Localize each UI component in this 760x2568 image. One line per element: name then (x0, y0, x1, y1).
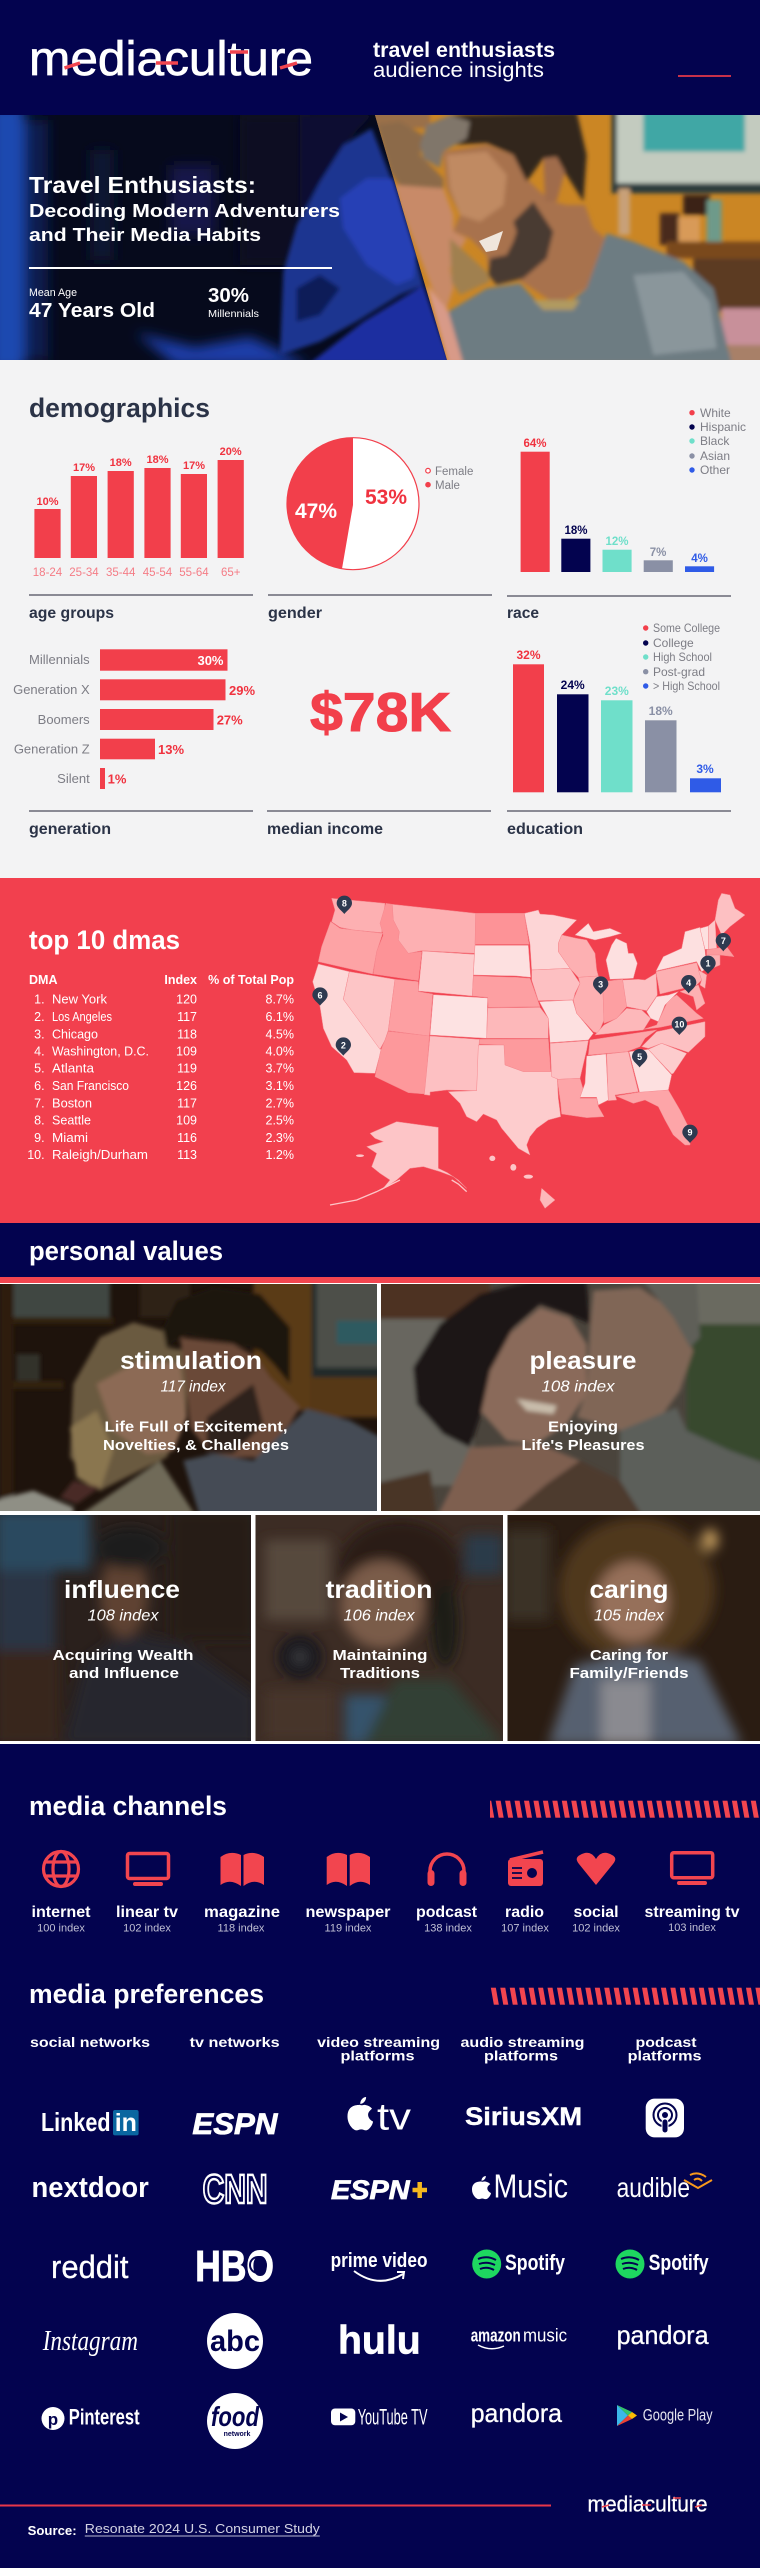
logo: mediaculture: mediaculture (29, 33, 313, 86)
table: top 10 dmas: Seattle (52, 1114, 91, 1128)
logo: ESPN+: ESPN (331, 2175, 410, 2205)
table: top 10 dmas: 3. (34, 1027, 45, 1041)
chart: education (513, 621, 721, 792)
panel: caring (505, 1515, 760, 1745)
map: united states: 6 (317, 990, 322, 1000)
column headings: platforms (628, 2048, 702, 2064)
logo: prime video: prime video (331, 2250, 428, 2272)
chart: education: 24% (561, 678, 585, 692)
logo: food network (207, 2393, 263, 2449)
table: top 10 dmas: 126 (176, 1079, 197, 1093)
text: pleasure: pleasure (530, 1347, 637, 1375)
label: gender: gender (268, 605, 322, 622)
table: top 10 dmas: 3.1% (266, 1079, 294, 1093)
legend: race: Asian (700, 449, 730, 463)
column headings: video streaming (317, 2034, 440, 2050)
footer logo: mediaculture: mediaculture (588, 2492, 708, 2516)
source note: Resonate 2024 U.S. Consumer Study (85, 2522, 321, 2536)
text: pleasure (522, 1347, 644, 1454)
channel indexes: 102 index (572, 1923, 620, 1935)
chart: generation (13, 649, 255, 789)
logo: Spotify podcast: Spotify (649, 2250, 709, 2275)
text: stimulation: Life Full of Excitement, (104, 1419, 288, 1436)
table: top 10 dmas: 116 (177, 1131, 197, 1145)
table: top 10 dmas: 120 (176, 993, 197, 1007)
chart: age groups: 18% (146, 454, 169, 466)
logo: Pinterest: Pinterest (69, 2405, 140, 2430)
table: top 10 dmas: 4.5% (266, 1027, 294, 1041)
channel labels: linear tv (116, 1904, 178, 1921)
channel indexes: 103 index (668, 1922, 716, 1934)
column headings: tv networks (190, 2034, 280, 2050)
icon: radio (508, 1852, 543, 1886)
text: tradition (326, 1576, 432, 1682)
legend: education: College (653, 636, 694, 650)
text: pleasure: 108 index (542, 1379, 616, 1396)
table: top 10 dmas: DMA (29, 973, 57, 987)
text: tradition: Maintaining (332, 1647, 428, 1664)
chart: generation: 1% (108, 772, 127, 786)
text: stimulation: stimulation (120, 1347, 262, 1375)
logo: abc: abc (210, 2325, 260, 2358)
logo: food network: network (224, 2431, 251, 2438)
text: stimulation: Novelties, & Challenges (103, 1437, 289, 1454)
text: tradition: 106 index (344, 1608, 416, 1625)
source note: Source: (28, 2524, 77, 2538)
chart: gender pie (287, 438, 473, 570)
table: top 10 dmas: 2.3% (266, 1131, 294, 1145)
text: influence (52, 1576, 194, 1682)
table: top 10 dmas: Los Angeles (52, 1010, 112, 1024)
column headings: podcast (636, 2034, 697, 2050)
map: united states (312, 893, 745, 1208)
channel indexes: 119 index (325, 1923, 372, 1935)
chart: race: 4% (691, 553, 708, 565)
column headings: social networks (30, 2034, 150, 2050)
map: united states: 7 (721, 936, 726, 946)
table: top 10 dmas: % of Total Pop (208, 973, 294, 987)
chart: age groups: 35-44 (106, 567, 136, 579)
table: top 10 dmas: 2. (34, 1010, 45, 1024)
panel: media channels (0, 1744, 760, 1964)
table: top 10 dmas: 117 (177, 1010, 197, 1024)
chart: education: 32% (516, 648, 541, 662)
label: median income: median income (267, 821, 383, 838)
legend: race: Black (700, 434, 730, 448)
logo: amazon music (471, 2326, 567, 2349)
logo: Spotify podcast (616, 2250, 709, 2278)
hero headline (29, 172, 340, 245)
label: age groups: age groups (29, 605, 114, 622)
logo: reddit: reddit (51, 2249, 129, 2285)
icon: newspaper (327, 1853, 370, 1886)
logo: Spotify audio: Spotify (505, 2250, 566, 2275)
header title (373, 39, 555, 82)
stat: median income: $78K (310, 681, 451, 743)
logo: ESPN: ESPN (192, 2108, 279, 2141)
chart: age groups: 20% (220, 446, 242, 458)
legend: race: Other (700, 463, 730, 477)
channel indexes: 138 index (424, 1923, 472, 1935)
text: tradition: Traditions (340, 1665, 420, 1682)
logo: HBO: HBO (195, 2242, 274, 2291)
heading: top 10 dmas: top 10 dmas (29, 925, 180, 955)
channel labels: newspaper (306, 1904, 390, 1921)
panel: demographics (0, 360, 760, 878)
chart: age groups: 17% (73, 462, 95, 474)
heading: media channels: media channels (29, 1791, 227, 1821)
logo: abc (207, 2313, 263, 2369)
table: top 10 dmas: 117 (177, 1096, 197, 1110)
map: united states: 9 (687, 1128, 692, 1138)
logo: Apple Music (472, 2168, 568, 2204)
logo: LinkedIn: Linked (41, 2107, 110, 2137)
icon: linear tv (128, 1854, 168, 1886)
chart: generation: Generation Z (14, 742, 90, 756)
map: united states: 5 (637, 1052, 642, 1062)
hero headline: Decoding Modern Adventurers (29, 201, 340, 221)
logo: Apple Music: Music (494, 2168, 568, 2204)
logo: nextdoor: nextdoor (32, 2172, 149, 2204)
text: caring: Family/Friends (570, 1665, 688, 1682)
millennials stat: 30% (208, 285, 249, 307)
table: top 10 dmas: Miami (52, 1131, 88, 1145)
logo: amazon music: music (523, 2326, 567, 2346)
chart: generation: 30% (197, 653, 224, 668)
chart: age groups: 18% (110, 457, 132, 469)
text: influence: 108 index (88, 1608, 160, 1625)
map: united states: 2 (341, 1040, 346, 1050)
map: united states: 1 (705, 959, 710, 969)
logo: Spotify audio (472, 2250, 566, 2278)
icon: social heart (577, 1853, 615, 1885)
chart: gender pie: 47% (295, 500, 337, 523)
chart: generation: Millennials (29, 652, 90, 667)
text: caring: caring (590, 1576, 668, 1604)
chart: generation: 13% (158, 742, 184, 757)
legend: education: High School (653, 650, 712, 664)
chart: gender pie: 53% (365, 486, 407, 509)
column headings: platforms (484, 2048, 558, 2064)
logo: YouTube TV: YouTube TV (358, 2405, 428, 2430)
chart: race: 64% (523, 438, 547, 450)
table: top 10 dmas: 1. (34, 993, 45, 1007)
table: top 10 dmas: 8.7% (266, 993, 294, 1007)
chart: age groups: 45-54 (143, 567, 173, 579)
map pins (312, 896, 731, 1143)
chart: race: 18% (564, 525, 588, 537)
hero photo: warm side with man (370, 108, 760, 365)
heading: media preferences: media preferences (29, 1979, 264, 2009)
logo: Apple TV (348, 2096, 411, 2138)
footer (0, 2492, 708, 2538)
mean age stat: 47 Years Old (29, 300, 155, 322)
chart: education: 23% (605, 684, 629, 698)
channel labels: podcast (416, 1904, 477, 1921)
table: top 10 dmas: Washington, D.C. (52, 1044, 149, 1058)
table: top 10 dmas: Boston (52, 1096, 92, 1110)
text: caring: 105 index (594, 1608, 665, 1625)
logo: SiriusXM: SiriusXM (465, 2103, 582, 2131)
icon: internet globe (44, 1852, 78, 1886)
channel indexes: 118 index (218, 1923, 265, 1935)
logo: Apple Podcasts (646, 2099, 684, 2137)
panel: pleasure (373, 1277, 760, 1517)
table: top 10 dmas: New York (52, 993, 108, 1007)
chart: age groups: 10% (36, 496, 59, 508)
text: stimulation: 117 index (160, 1379, 226, 1396)
table: top 10 dmas: 5. (34, 1062, 45, 1076)
hero headline: and Their Media Habits (29, 225, 261, 245)
logo: Google Play (617, 2405, 713, 2426)
channel labels: streaming tv (644, 1904, 740, 1921)
panel: media preferences (29, 1979, 760, 2449)
text: tradition: tradition (326, 1576, 432, 1604)
logo: Instagram: Instagram (42, 2326, 138, 2357)
icon: magazine (220, 1853, 264, 1886)
table: top 10 dmas: 109 (176, 1114, 197, 1128)
icon: podcast headphones (428, 1854, 466, 1886)
legend: race (689, 406, 746, 477)
column headings: platforms (340, 2048, 415, 2064)
hero headline: Travel Enthusiasts: (29, 172, 256, 198)
chart: education: 3% (696, 762, 714, 776)
chart: race: 12% (605, 536, 629, 548)
text: influence: Acquiring Wealth (52, 1647, 194, 1664)
chart: age groups: 17% (183, 460, 205, 472)
text: influence: and Influence (69, 1665, 179, 1682)
label: education: education (507, 821, 583, 838)
table: top 10 dmas: 10. (27, 1148, 45, 1162)
chart: gender pie: Male (435, 480, 460, 492)
table: top 10 dmas: 6. (34, 1079, 45, 1093)
panel: stimulation (0, 1277, 387, 1517)
logo: food network: food (211, 2401, 260, 2432)
text: stimulation (103, 1347, 289, 1454)
table: top 10 dmas: 113 (177, 1148, 197, 1162)
legend: education: > High School (653, 679, 720, 693)
panel: influence (0, 1510, 255, 1745)
column headings: audio streaming (460, 2034, 584, 2050)
table: top 10 dmas: 4.0% (266, 1044, 294, 1058)
chart: education: 18% (649, 704, 673, 718)
map: united states: 8 (342, 899, 347, 909)
channel labels: internet (32, 1904, 90, 1921)
map: united states: 3 (598, 979, 603, 989)
text: caring (570, 1576, 688, 1682)
legend: race: Hispanic (700, 420, 746, 434)
table: top 10 dmas: 109 (176, 1044, 197, 1058)
logo: pandora audio: pandora (471, 2398, 563, 2428)
table: top 10 dmas: Atlanta (52, 1062, 94, 1076)
channel indexes (37, 1922, 716, 1935)
panel: top 10 dmas (0, 878, 760, 1223)
table: top 10 dmas: 2.7% (266, 1096, 294, 1110)
table: top 10 dmas: 2.5% (266, 1114, 294, 1128)
map: united states: 10 (674, 1020, 684, 1030)
table: top 10 dmas: Raleigh/Durham (52, 1148, 148, 1162)
label: race: race (507, 605, 539, 622)
millennials stat: Millennials (208, 308, 259, 320)
table: top 10 dmas: 4. (34, 1044, 45, 1058)
channel labels: social (574, 1904, 618, 1921)
chart: generation: Silent (57, 771, 90, 786)
label: generation: generation (29, 821, 111, 838)
table: top 10 dmas: 1.2% (266, 1148, 294, 1162)
millennials stat (208, 285, 259, 320)
header title: audience insights (373, 59, 544, 82)
band: personal values: personal values (29, 1236, 223, 1266)
header band (0, 0, 760, 115)
mean age stat (29, 287, 155, 322)
chart: age groups (33, 446, 244, 579)
logo: Pinterest: p (48, 2410, 58, 2429)
legend: education: Some College (653, 621, 720, 635)
table: top 10 dmas: 119 (177, 1062, 197, 1076)
table: top 10 dmas: Index (164, 973, 197, 987)
text: influence: influence (64, 1576, 180, 1604)
logo: hulu: hulu (338, 2319, 421, 2363)
chart: race (521, 406, 746, 572)
table: top 10 dmas: 118 (177, 1027, 197, 1041)
logo: LinkedIn: in (115, 2109, 137, 2137)
logo: amazon music: amazon (471, 2326, 521, 2346)
channel indexes: 100 index (37, 1923, 85, 1935)
table: top 10 dmas: 3.7% (266, 1062, 294, 1076)
chart: age groups: 55-64 (179, 567, 209, 579)
band: personal values (0, 1223, 760, 1283)
channel indexes: 107 index (501, 1923, 549, 1935)
text: caring: Caring for (590, 1647, 668, 1664)
table: top 10 dmas: 9. (34, 1131, 45, 1145)
table: top 10 dmas: 8. (34, 1114, 45, 1128)
map: united states: 4 (686, 978, 691, 988)
logo: Google Play: Google Play (643, 2406, 713, 2424)
chart: generation: 27% (217, 712, 243, 728)
channel labels (32, 1904, 740, 1921)
channel indexes: 102 index (123, 1923, 171, 1935)
channel labels: radio (505, 1904, 544, 1921)
chart: generation: 29% (229, 683, 255, 698)
table: top 10 dmas (27, 973, 294, 1162)
source note (28, 2522, 321, 2538)
logo: CNN: CNN (203, 2166, 268, 2212)
legend: education: Post-grad (653, 665, 705, 679)
chart: age groups: 25-34 (69, 567, 99, 579)
table: top 10 dmas: 7. (34, 1096, 45, 1110)
logo: prime video (331, 2250, 428, 2281)
table: top 10 dmas: Chicago (52, 1027, 98, 1041)
channel labels: magazine (204, 1904, 280, 1921)
logo: Pinterest (42, 2405, 140, 2430)
text: pleasure: Enjoying (548, 1419, 618, 1436)
table: top 10 dmas: 6.1% (266, 1010, 294, 1024)
column headings (30, 2034, 702, 2064)
chart: age groups: 65+ (221, 567, 241, 579)
hero photo panel (0, 105, 760, 370)
legend: education (643, 621, 720, 693)
table: top 10 dmas: San Francisco (52, 1079, 129, 1093)
header title: travel enthusiasts (373, 39, 555, 62)
icon: streaming tv (672, 1853, 713, 1885)
hero photo: blue duotone side (0, 105, 450, 370)
mean age stat: Mean Age (29, 287, 77, 299)
text: pleasure: Life's Pleasures (522, 1437, 644, 1454)
chart: generation: Generation X (13, 682, 90, 697)
logo: pandora podcast: pandora (617, 2320, 709, 2350)
legend: race: White (700, 406, 731, 420)
logo: audible: audible (617, 2172, 690, 2203)
chart: gender pie: Female (435, 466, 473, 478)
logo: YouTube TV (331, 2405, 428, 2430)
chart: race: 7% (650, 547, 666, 559)
chart: age groups: 18-24 (33, 567, 63, 579)
heading: demographics: demographics (29, 393, 210, 423)
logo: Apple TV: tv (377, 2096, 411, 2138)
chart: generation: Boomers (38, 712, 90, 727)
panel: tradition (256, 1515, 505, 1745)
